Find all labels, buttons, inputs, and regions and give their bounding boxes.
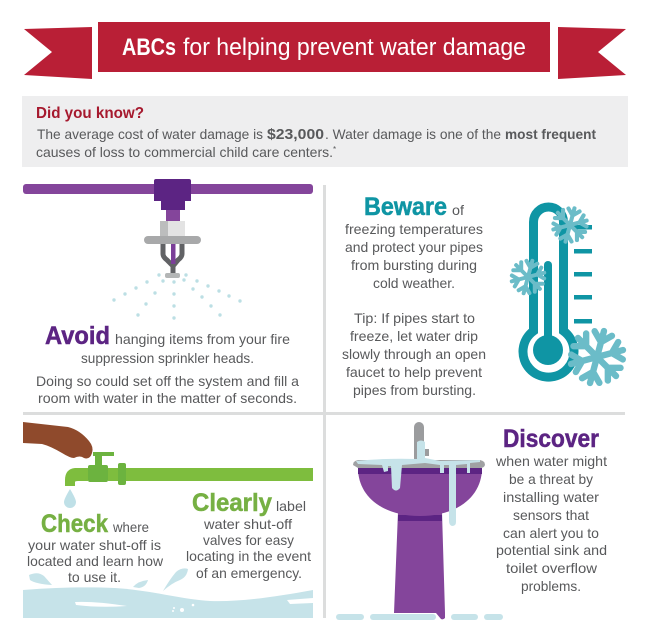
avoid text: suppression sprinkler heads. <box>81 350 254 366</box>
panel: check and clearly <box>23 422 313 618</box>
clearly text: valves for easy <box>203 532 294 548</box>
beware text: freeze, let water drip <box>350 328 478 344</box>
discover text: when water might <box>495 453 607 469</box>
discover text: toilet overflow <box>506 560 598 576</box>
beware text: of <box>452 202 464 218</box>
panel: did you know <box>22 96 628 167</box>
beware text: from bursting during <box>351 257 477 273</box>
discover text: problems. <box>521 578 581 594</box>
clearly heading: Clearly <box>192 489 272 517</box>
icon: snowflake top <box>548 204 592 246</box>
discover text: installing water <box>503 489 599 505</box>
title text: for helping prevent water damage <box>183 34 526 61</box>
beware text: faucet to help prevent <box>346 364 482 380</box>
beware heading: Beware <box>364 193 447 221</box>
avoid text: Doing so could set off the system and fill a <box>36 373 299 389</box>
beware text: slowly through an open <box>342 346 486 362</box>
discover text: potential sink and <box>496 542 607 558</box>
did you know body text: $23,000 <box>267 126 324 143</box>
avoid text: hanging items from your fire <box>115 331 290 347</box>
check text: to use it. <box>68 569 121 585</box>
did you know body text: most frequent <box>505 126 596 142</box>
floor puddles <box>336 614 503 620</box>
check text: located and learn how <box>27 553 164 569</box>
panel dividers <box>23 185 625 618</box>
did you know body text: . Water damage is one of the <box>325 126 501 142</box>
icon: fire sprinkler <box>23 179 313 278</box>
panel: discover <box>336 422 607 620</box>
beware text: and protect your pipes <box>345 239 483 255</box>
did you know body text <box>36 126 596 160</box>
clearly text <box>186 498 311 581</box>
icon: overflowing sink <box>336 422 503 620</box>
beware text: freezing temperatures <box>345 221 483 237</box>
discover heading: Discover <box>503 425 599 453</box>
clearly text: locating in the event <box>186 548 311 564</box>
faucet <box>414 422 429 462</box>
discover text: be a threat by <box>509 471 593 487</box>
icon: thermometer <box>523 207 592 377</box>
basin rim <box>353 460 485 468</box>
basin <box>358 468 482 516</box>
avoid text <box>36 331 299 406</box>
banner right tail <box>558 27 626 79</box>
pedestal <box>394 512 445 619</box>
avoid heading: Avoid <box>45 322 110 350</box>
icon: snowflake large <box>563 324 631 390</box>
icon: water drop <box>64 489 76 508</box>
water spray dots <box>112 273 242 320</box>
discover text <box>495 453 607 594</box>
title text: ABCs <box>122 34 176 61</box>
icon: snowflake left <box>507 256 549 298</box>
banner main ribbon <box>98 22 550 72</box>
beware text: cold weather. <box>373 275 455 291</box>
did you know body text: The average cost of water damage is <box>37 126 263 142</box>
discover text: can alert you to <box>503 525 599 541</box>
icon: water pool and splashes <box>23 568 313 618</box>
clearly text: of an emergency. <box>196 565 302 581</box>
icon: green pipe and valve <box>65 452 313 486</box>
icon: hand on valve <box>23 422 93 458</box>
beware text: Tip: If pipes start to <box>354 310 475 326</box>
check text: where <box>112 519 149 535</box>
check heading: Check <box>41 510 108 538</box>
did you know heading: Did you know? <box>36 105 144 122</box>
did you know body text: causes of loss to commercial child care centers. <box>36 144 333 160</box>
beware text <box>342 202 486 398</box>
discover text: sensors that <box>513 507 589 523</box>
panel: beware <box>342 193 631 398</box>
banner left tail <box>24 27 92 79</box>
did you know body text: * <box>333 145 336 154</box>
clearly text: label <box>276 498 306 514</box>
check text: your water shut-off is <box>28 537 161 553</box>
check text <box>27 519 164 585</box>
avoid text: room with water in the matter of seconds. <box>38 390 297 406</box>
clearly text: water shut-off <box>203 516 292 532</box>
panel: avoid <box>23 179 313 406</box>
overflow water <box>356 440 480 526</box>
beware text: pipes from bursting. <box>353 382 476 398</box>
title banner <box>24 22 626 79</box>
